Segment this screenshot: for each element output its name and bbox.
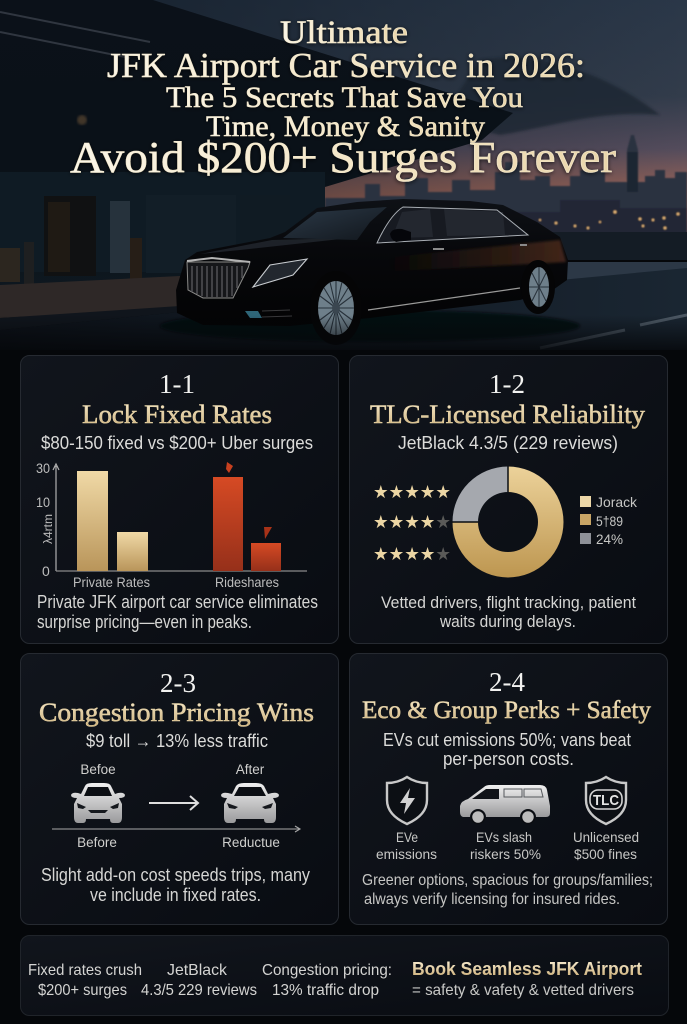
- headlight: [253, 259, 307, 287]
- summary: JetBlack: [141, 962, 257, 999]
- donut legend: 5†89: [596, 513, 623, 529]
- panel: summary footer: [20, 936, 668, 1016]
- icon: lightning shield: [387, 777, 427, 824]
- sky: [0, 0, 687, 240]
- panel subheading: $80-150 fixed vs $200+ Uber surges: [41, 433, 313, 453]
- door handles: [433, 245, 527, 249]
- side windows: [377, 207, 528, 243]
- star ratings: ★★★★★: [373, 482, 451, 503]
- summary: fixed rates: $200+ surges: [38, 982, 127, 999]
- icon captions: $500 fines: [574, 846, 637, 862]
- road: [0, 268, 687, 350]
- star ratings: ★★★★★: [373, 544, 451, 565]
- window chrome trim: [377, 207, 528, 243]
- panel description: Private JFK airport car service eliminates: [37, 592, 318, 612]
- rear wheel: [521, 260, 555, 314]
- panel number: 1-1: [159, 369, 195, 399]
- icon captions: EVs slash: [476, 829, 532, 845]
- panel subheading: JetBlack 4.3/5 (229 reviews): [398, 433, 618, 453]
- bar chart: Private Rates: [73, 574, 150, 590]
- panel subheading: [383, 730, 631, 769]
- waterfront barrier: [500, 232, 687, 260]
- star ratings: ★★★★★: [373, 512, 451, 533]
- donut legend: [580, 494, 638, 547]
- summary: congestion pricing: 13% traffic drop: [272, 982, 379, 999]
- panel description: [41, 865, 310, 905]
- before and after diagram: [52, 762, 300, 850]
- panel heading: Congestion Pricing Wins: [39, 698, 314, 727]
- panel heading: TLC-Licensed Reliability: [370, 400, 645, 429]
- title: Ultimate: [280, 15, 408, 51]
- panel heading: Eco & Group Perks + Safety: [362, 697, 651, 724]
- bar chart: 30: [36, 460, 50, 476]
- icon captions: [376, 829, 639, 862]
- panel description: surprise pricing—even in peaks.: [37, 612, 252, 632]
- call to action: = safety & vafety & vetted drivers: [412, 982, 634, 999]
- summary: fixed rates: Fixed rates crush: [28, 962, 142, 979]
- car body: [176, 199, 568, 326]
- icon: passenger van: [460, 785, 550, 824]
- bar chart: Rideshares: [215, 574, 279, 590]
- donut legend: Jorack: [596, 494, 638, 510]
- front wheel: [310, 271, 362, 345]
- panel number: 1-2: [489, 369, 525, 399]
- panel: 2-3 congestion pricing wins: [20, 654, 338, 924]
- icon captions: emissions: [376, 846, 437, 862]
- panel subheading: EVs cut emissions 50%; vans beat: [383, 730, 631, 750]
- before and after diagram: After: [236, 762, 265, 777]
- summary: JetBlack: JetBlack: [167, 962, 228, 979]
- panel: 1-1 lock fixed rates: [20, 356, 338, 644]
- panel subheading: $9 toll → 13% less traffic: [86, 731, 268, 751]
- title: JFK Airport Car Service in 2026:: [107, 46, 585, 85]
- city skyline: [325, 135, 687, 240]
- panel subheading: per-person costs.: [443, 749, 574, 769]
- panel description: ve include in fixed rates.: [90, 885, 261, 905]
- grille: [187, 262, 250, 298]
- summary: congestion pricing: Congestion pricing:: [262, 962, 392, 979]
- terminal facade glass: [0, 172, 325, 272]
- donut legend: 24%: [596, 531, 623, 547]
- icon captions: riskers 50%: [470, 846, 541, 862]
- summary: congestion pricing: [262, 962, 392, 999]
- summary: fixed rates: [28, 962, 142, 999]
- sidewalk: [0, 276, 180, 318]
- panel description: [381, 593, 636, 631]
- summary: JetBlack: 4.3/5 229 reviews: [141, 982, 257, 999]
- windshield: [283, 207, 387, 240]
- car shadow: [160, 310, 580, 342]
- icon captions: Unlicensed: [573, 829, 639, 845]
- panel description: Greener options, spacious for groups/families;: [362, 872, 653, 889]
- panel number: 2-3: [160, 668, 196, 698]
- panel description: [37, 592, 318, 632]
- fade to page: [0, 315, 687, 357]
- panel number: 2-4: [489, 667, 525, 697]
- bollards: [0, 248, 20, 282]
- chrome sill: [368, 288, 520, 310]
- donut chart: [452, 466, 564, 578]
- panel description: Vetted drivers, flight tracking, patient: [381, 593, 636, 612]
- lower bumper detail: [245, 311, 262, 318]
- arrow: [149, 796, 198, 810]
- lane markings: [540, 315, 687, 348]
- call to action: Book Seamless JFK Airport: [412, 959, 642, 979]
- panel description: always verify licensing for insured rides.: [364, 891, 620, 908]
- icon captions: EVe: [396, 829, 418, 845]
- panel: 2-4 eco and group perks plus safety: [350, 654, 668, 924]
- timeline arrow: [52, 826, 300, 832]
- icon: car before: [71, 783, 125, 823]
- panel description: [362, 872, 653, 908]
- panel description: waits during delays.: [439, 612, 576, 631]
- bar chart: [36, 460, 307, 590]
- panel heading: Lock Fixed Rates: [82, 400, 272, 429]
- title: Time, Money & Sanity: [206, 110, 485, 143]
- panel description: Slight add-on cost speeds trips, many: [41, 865, 310, 885]
- bar chart: 10: [36, 494, 50, 510]
- hood highlight: [200, 238, 350, 254]
- star ratings: [373, 482, 451, 565]
- icon: TLC shield: [586, 777, 626, 824]
- bar chart: 0: [42, 563, 50, 579]
- before and after diagram: Befoe: [80, 762, 116, 777]
- call to action: [412, 959, 642, 999]
- before and after diagram: Before: [77, 835, 117, 850]
- icon: TLC shield: TLC: [593, 792, 619, 809]
- title: The 5 Secrets That Save You: [166, 81, 523, 114]
- body reflection: [380, 240, 566, 272]
- hero photo: limousine at the airport at dusk: [0, 0, 687, 357]
- canopy lines: [0, 12, 150, 58]
- title: Avoid $200+ Surges Forever: [70, 133, 616, 182]
- car: [160, 199, 580, 345]
- before and after diagram: Reductue: [222, 835, 280, 850]
- icon: car after: [221, 783, 279, 823]
- bar chart: λ4rtm: [41, 514, 55, 544]
- dark cloud bank: [440, 58, 660, 135]
- mirror: [390, 229, 411, 242]
- terminal building: [0, 0, 513, 300]
- panel: 1-2 TLC-licensed reliability: [350, 356, 668, 644]
- title: [70, 15, 616, 182]
